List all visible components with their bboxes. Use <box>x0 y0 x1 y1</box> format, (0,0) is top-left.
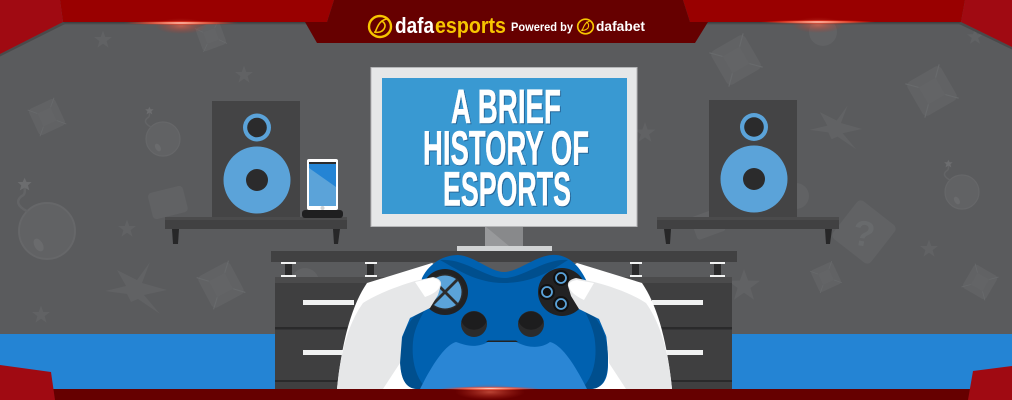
top right corner <box>961 0 1012 47</box>
left speaker <box>212 101 300 217</box>
top left red bar <box>60 0 334 22</box>
d-pad <box>422 269 468 315</box>
bottom flare <box>440 384 540 400</box>
logo: dafaesports powered by dafabet: Powered by <box>511 20 573 34</box>
blue floor <box>0 334 1012 390</box>
right speaker <box>709 100 797 217</box>
logo: dafaesports powered by dafabet: dafa <box>395 13 435 38</box>
phone on dock <box>302 159 343 218</box>
controller centre panel <box>420 342 587 389</box>
logo: dafaesports powered by dafabet <box>369 13 645 38</box>
left hand <box>337 277 441 389</box>
title: HISTORY OF <box>423 122 589 176</box>
right hand <box>568 278 672 389</box>
monitor <box>371 68 637 252</box>
icon: dafa logo mark <box>369 16 391 37</box>
title: A BRIEF <box>451 81 561 134</box>
top left corner <box>0 0 63 54</box>
media table top <box>271 251 737 277</box>
logo: dafaesports powered by dafabet: dafabet <box>596 18 645 34</box>
title: ESPORTS <box>443 164 571 216</box>
title: A BRIEF <box>452 82 562 135</box>
top flares <box>123 17 876 34</box>
white sleeves <box>337 263 672 389</box>
face buttons <box>538 268 586 316</box>
background pattern: faint game icons <box>18 18 998 323</box>
top header shadow <box>0 22 1012 56</box>
icon: question block: ? <box>849 211 878 256</box>
icon: dafabet logo mark <box>578 19 593 34</box>
top right red bar <box>683 0 965 22</box>
analog sticks <box>460 311 545 345</box>
left shelf <box>165 217 347 244</box>
title <box>423 81 590 218</box>
central logo tab <box>305 0 708 43</box>
drawers <box>275 277 732 389</box>
logo: dafaesports powered by dafabet: esports <box>435 13 506 38</box>
right shelf <box>657 217 839 244</box>
title: ESPORTS <box>444 164 572 218</box>
bottom bar <box>0 389 1012 400</box>
game controller <box>400 255 608 389</box>
icon: question block <box>830 198 898 266</box>
title: HISTORY OF <box>424 124 590 176</box>
bottom right red corner <box>968 366 1012 400</box>
bottom left red corner <box>0 365 55 400</box>
